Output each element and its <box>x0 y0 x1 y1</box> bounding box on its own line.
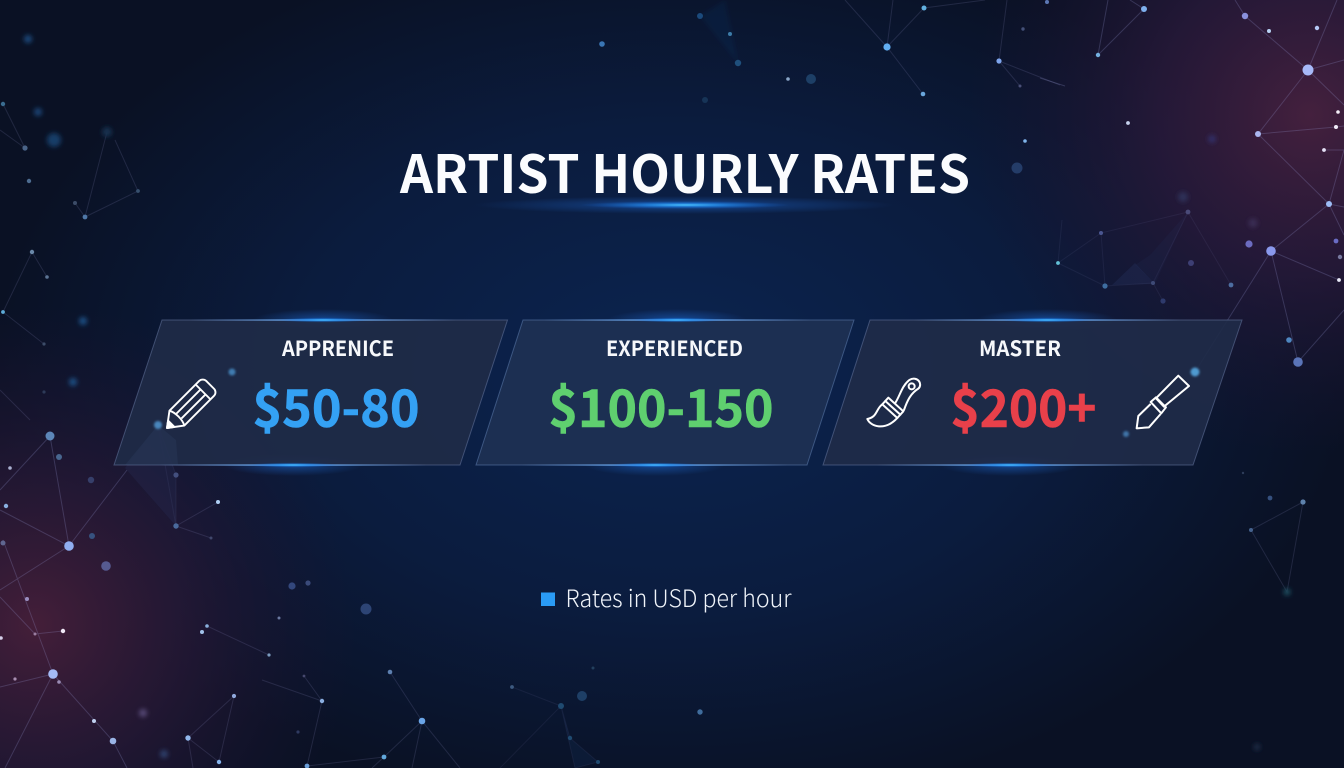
faint triangle behind apprentice card <box>125 425 178 465</box>
background nodes behind apprentice card <box>154 368 236 429</box>
panel: experienced <box>476 318 854 468</box>
price: $100-150: $100-150 <box>548 367 774 442</box>
price: $50-80: $50-80 <box>252 367 420 442</box>
label: apprentice: APPRENICE <box>281 333 394 363</box>
panel: master <box>823 318 1242 468</box>
legend note <box>541 579 792 614</box>
legend swatch <box>541 592 555 606</box>
icon: fountain pen <box>1137 376 1189 428</box>
price: $200+: $200+ <box>950 367 1096 442</box>
title underline glow <box>475 196 895 214</box>
label: experienced: EXPERIENCED <box>606 333 743 363</box>
icon: pencil <box>160 377 218 435</box>
title: ARTIST HOURLY RATES <box>399 133 970 209</box>
panel glows <box>223 309 1117 476</box>
background nodes behind master card <box>1123 368 1200 437</box>
legend text: Rates in USD per hour <box>566 579 792 614</box>
icon: paint brush <box>867 379 920 426</box>
panel: apprentice <box>114 318 508 468</box>
label: master: MASTER <box>979 333 1061 363</box>
